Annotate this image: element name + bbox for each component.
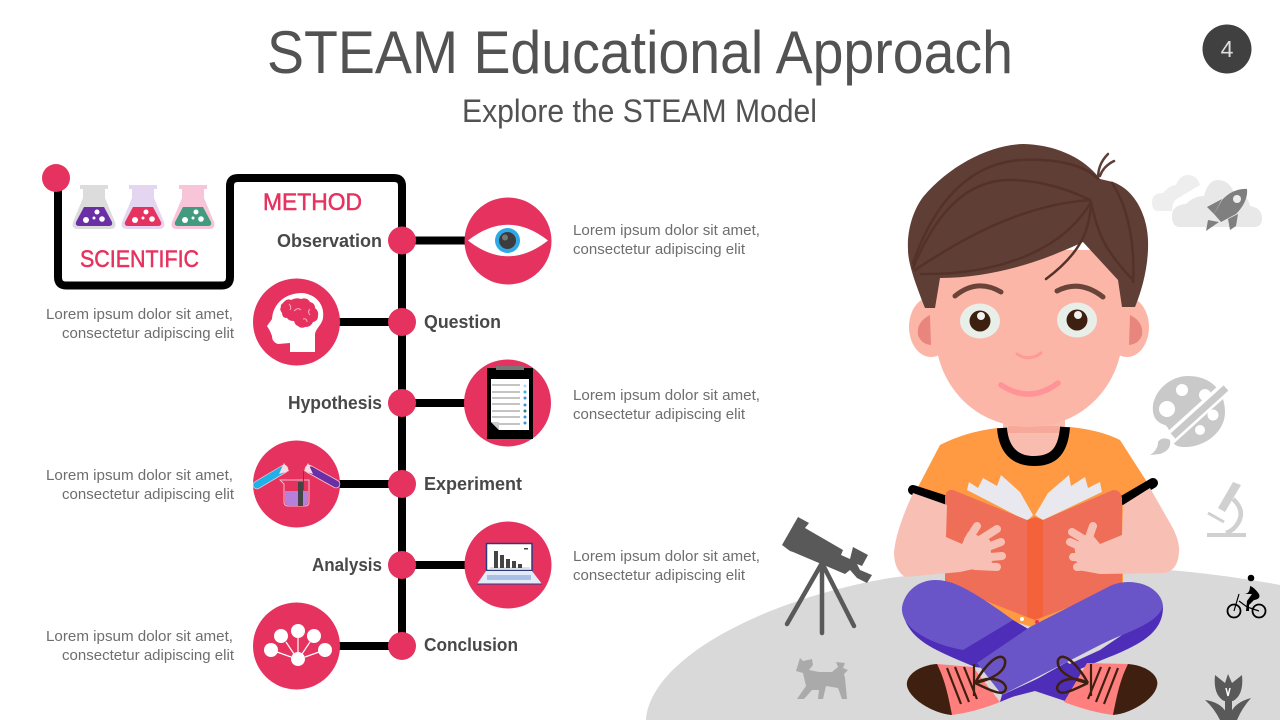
icon: head with brain xyxy=(253,278,340,366)
text: experiment description: Lorem ipsum dolor sit amet, xyxy=(46,468,233,484)
book pages xyxy=(967,475,1033,521)
eyebrows xyxy=(955,286,1103,297)
illustration: boy reading a book xyxy=(894,144,1179,715)
ears xyxy=(909,297,1149,357)
neck shadow xyxy=(1008,426,1059,433)
icon: microscope xyxy=(1207,482,1246,535)
text: analysis description xyxy=(573,549,760,584)
step: question: Question xyxy=(424,312,501,332)
icon: tulip xyxy=(1205,674,1251,720)
icon: cyclist xyxy=(1228,575,1266,618)
left shoe xyxy=(907,657,1006,715)
heading: method: METHOD xyxy=(263,189,362,216)
flask icons xyxy=(73,185,214,229)
arms and hands xyxy=(894,488,1179,577)
icon: clipboard xyxy=(464,360,551,446)
face xyxy=(935,250,1123,427)
right shoe xyxy=(1057,657,1157,715)
text: conclusion description: Lorem ipsum dolor sit amet, xyxy=(46,629,233,645)
step: experiment xyxy=(335,470,522,498)
text: experiment description: consectetur adipiscing elit xyxy=(62,487,234,503)
flask: purple xyxy=(73,185,115,229)
text: hypothesis description: Lorem ipsum dolor sit amet, xyxy=(573,388,760,404)
step: question xyxy=(335,308,501,336)
step: observation: Observation xyxy=(277,231,382,251)
shirt collar xyxy=(1002,427,1065,461)
left upper arm xyxy=(910,490,947,550)
step: observation xyxy=(277,226,470,254)
text: observation description xyxy=(573,223,760,258)
text: analysis description: Lorem ipsum dolor sit amet, xyxy=(573,549,760,565)
nose and mouth xyxy=(1001,353,1058,394)
orange shirt xyxy=(918,427,1147,628)
icon: clouds xyxy=(1152,175,1262,227)
icon: beaker and test tubes xyxy=(253,440,340,528)
book cover xyxy=(945,490,1027,617)
text: experiment description xyxy=(46,468,234,503)
step: conclusion xyxy=(335,632,518,660)
sleeve bands xyxy=(913,483,1153,501)
page number badge xyxy=(1202,24,1252,74)
icon: laptop with chart xyxy=(464,522,552,608)
page number badge: 4 xyxy=(1221,36,1234,62)
step: analysis: Analysis xyxy=(312,555,382,575)
subtitle: Explore the STEAM Model xyxy=(462,93,817,129)
step: hypothesis: Hypothesis xyxy=(288,393,382,413)
step: conclusion: Conclusion xyxy=(424,635,518,655)
crossed legs xyxy=(902,580,1163,702)
text: question description: Lorem ipsum dolor sit amet, xyxy=(46,307,233,323)
scientific method connector line xyxy=(58,178,402,646)
step: analysis xyxy=(312,551,470,579)
text: question description xyxy=(46,307,234,342)
text: observation description: Lorem ipsum dolor sit amet, xyxy=(573,223,760,239)
step: hypothesis xyxy=(288,389,470,417)
text: conclusion description xyxy=(46,629,234,664)
icon: converging network xyxy=(253,602,340,690)
icon: dog xyxy=(796,658,848,699)
text: observation description: consectetur adipiscing elit xyxy=(573,242,745,258)
hair xyxy=(908,144,1148,308)
icon: eye xyxy=(464,198,552,284)
start dot xyxy=(42,164,70,192)
flask: red xyxy=(122,185,164,229)
ground shape xyxy=(646,567,1280,720)
text: conclusion description: consectetur adipiscing elit xyxy=(62,648,234,664)
text: hypothesis description xyxy=(573,388,760,423)
neck xyxy=(1003,420,1065,462)
step: experiment: Experiment xyxy=(424,474,522,494)
icon: telescope xyxy=(782,517,872,633)
text: hypothesis description: consectetur adipiscing elit xyxy=(573,407,745,423)
text: question description: consectetur adipiscing elit xyxy=(62,326,234,342)
icon: rocket xyxy=(1206,189,1247,231)
text: analysis description: consectetur adipiscing elit xyxy=(573,568,745,584)
flask: green xyxy=(172,185,214,229)
title: STEAM Educational Approach xyxy=(267,19,1013,86)
eyes xyxy=(960,302,1097,338)
heading: scientific: SCIENTIFIC xyxy=(80,246,199,273)
icon: palette and brush xyxy=(1150,376,1232,455)
